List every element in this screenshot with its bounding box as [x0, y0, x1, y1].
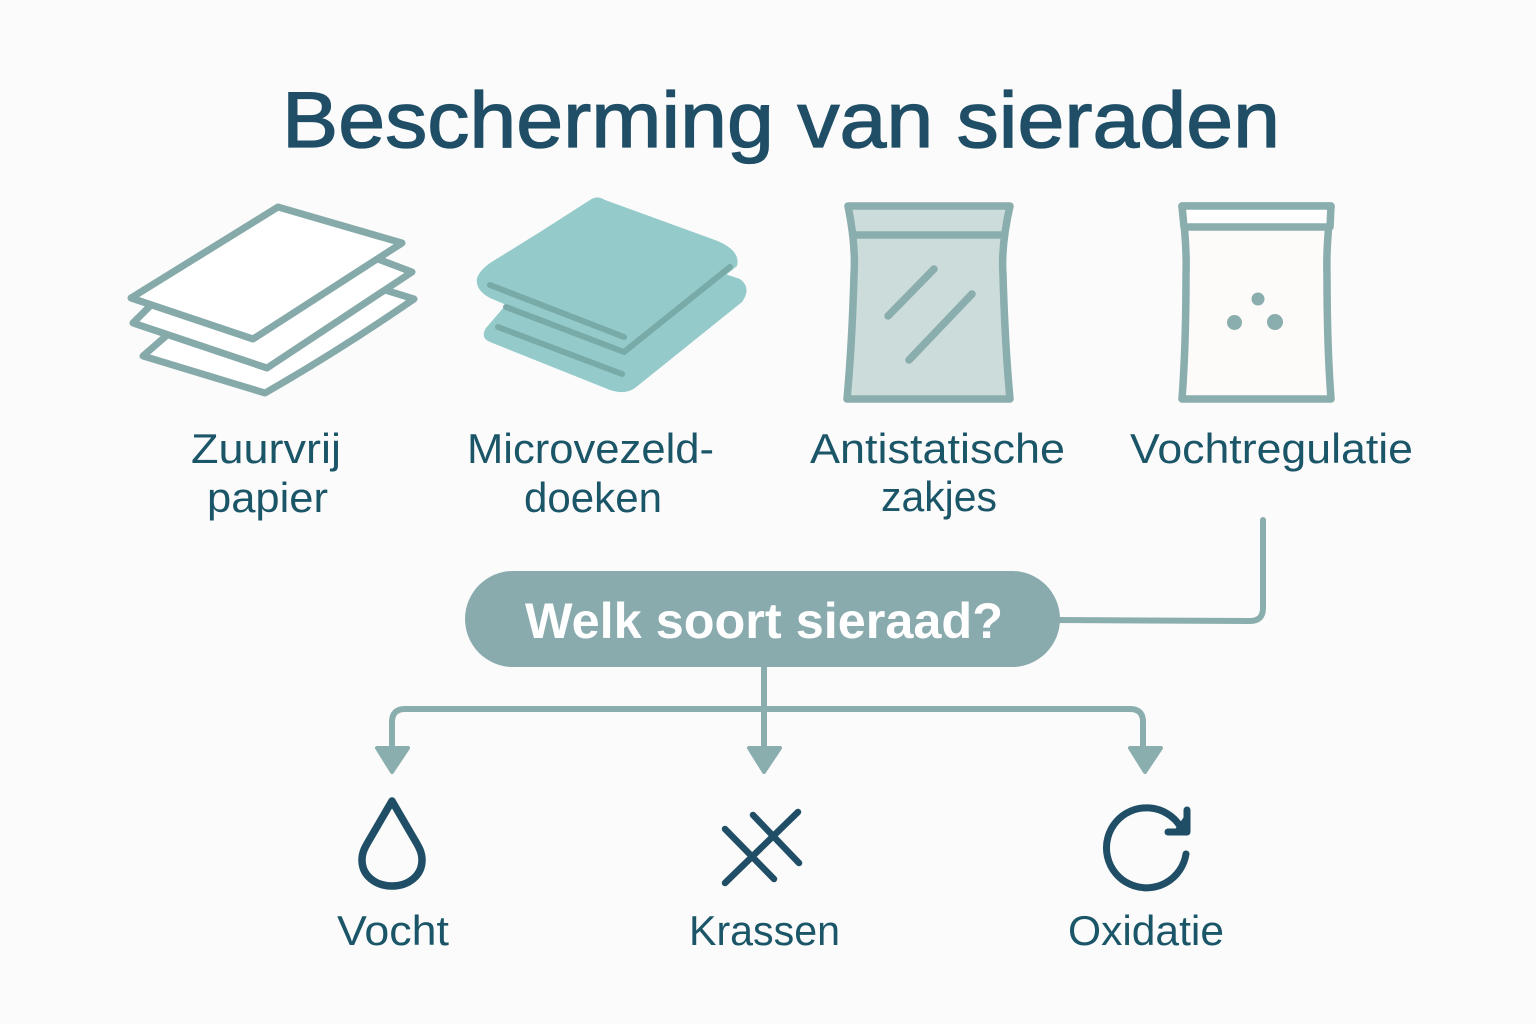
label: Vocht: Vocht: [337, 907, 449, 954]
title: Bescherming van sieraden: [282, 75, 1280, 164]
icon: oxidation cycle: [1106, 808, 1187, 888]
label: Zuurvrij papier: [191, 425, 341, 521]
label: Microvezeldoeken: [467, 425, 714, 521]
icon: paper stack: [131, 207, 414, 393]
label: Antistatische zakjes: Antistatische: [810, 425, 1065, 472]
label: Microvezeldoeken: doeken: [524, 474, 662, 521]
label: Microvezeldoeken: Microvezeld-: [467, 425, 714, 472]
label: Zuurvrij papier: Zuurvrij: [191, 425, 341, 472]
label: Zuurvrij papier: papier: [207, 474, 328, 521]
label: Antistatische zakjes: [810, 425, 1065, 520]
label: Krassen: Krassen: [689, 907, 840, 954]
icon: scratches: [725, 812, 799, 883]
icon: water drop: [362, 801, 422, 886]
label: Oxidatie: Oxidatie: [1068, 907, 1224, 954]
question pill: [465, 571, 1060, 667]
icon: antistatic bag: [847, 206, 1010, 399]
label: Antistatische zakjes: zakjes: [881, 473, 997, 520]
label: Vochtregulatie: Vochtregulatie: [1130, 425, 1413, 472]
question pill: Welk soort sieraad?: [525, 593, 1003, 649]
branching arrows: [377, 667, 1161, 772]
icon: moisture regulation bag: [1182, 206, 1331, 399]
connector arrow from Vochtregulatie to question: [1055, 520, 1263, 621]
icon: microfiber cloths: [477, 198, 747, 392]
